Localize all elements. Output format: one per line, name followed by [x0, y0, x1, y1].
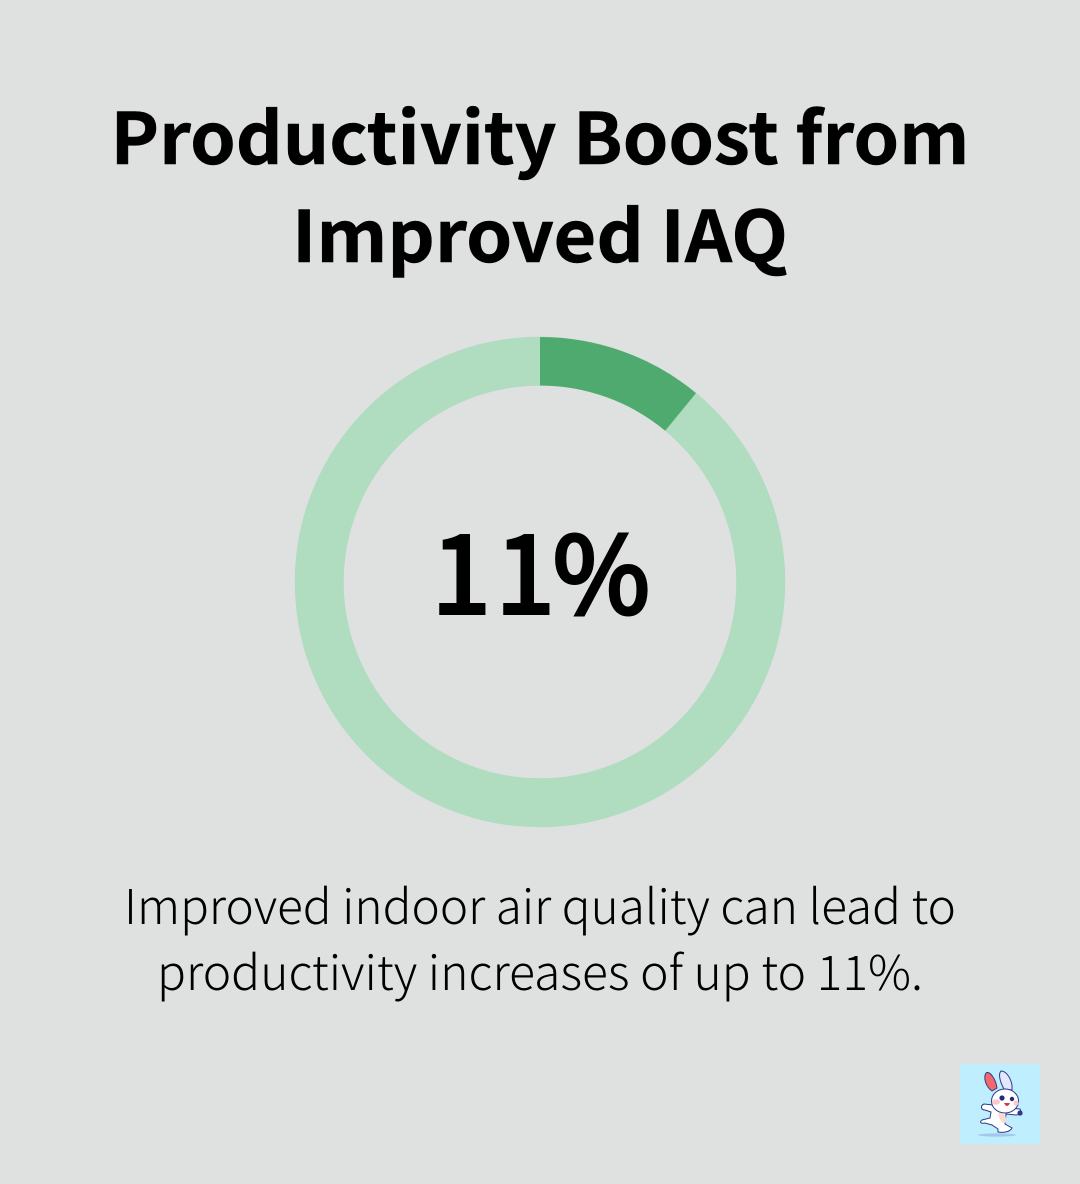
description text: [124, 868, 956, 1004]
title: Improved IAQ: [292, 181, 788, 283]
icon: running bunny logo: [960, 1064, 1040, 1144]
description text: Improved indoor air quality can lead to: [124, 868, 956, 938]
donut highlighted segment: 11%: [540, 337, 696, 431]
bunny body and limbs: [981, 1104, 1022, 1132]
bunny right ear: [1000, 1071, 1012, 1090]
bunny left ear: [985, 1072, 997, 1091]
donut center value: 11%: [432, 492, 650, 644]
title: [110, 83, 970, 283]
donut chart: [319, 337, 761, 803]
donut track: [319, 361, 761, 803]
title: Productivity Boost from: [110, 83, 970, 185]
bunny head: [992, 1089, 1018, 1113]
description text: productivity increases of up to 11%.: [157, 934, 923, 1004]
